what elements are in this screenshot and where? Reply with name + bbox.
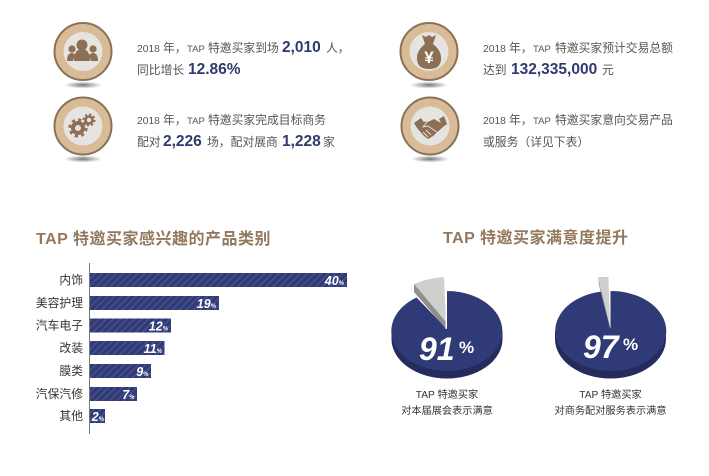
text: transaction amount: 达到 <box>483 63 507 77</box>
bar: beauty care 19%: 19% <box>197 297 217 311</box>
pie chart: 97% <box>555 277 666 378</box>
text: transaction amount: 元 <box>602 63 614 77</box>
text: matchmaking: 2018 <box>137 116 160 127</box>
bar: maintenance 7%: 7% <box>122 388 135 402</box>
text: attendee growth: 同比增长 <box>137 63 184 77</box>
caption: 91% <box>401 388 493 417</box>
icon: money bag badge <box>400 23 458 88</box>
bar: other 2% <box>59 409 105 424</box>
text: transaction value: TAP <box>533 44 551 55</box>
heading: product categories: TAP 特邀买家感兴趣的产品类别 <box>36 229 271 248</box>
pie chart: 91%: 91 <box>419 331 455 367</box>
bar: modification 11% <box>59 341 164 356</box>
icon: attendees badge <box>54 23 112 88</box>
bar: film 9%: 9% <box>136 365 149 379</box>
icon: gears badge <box>54 98 112 162</box>
icon: handshake badge <box>402 98 458 162</box>
bar: film 9%: 膜类 <box>59 364 83 378</box>
text: attendees: 人， <box>326 41 350 55</box>
bar: interior 40% <box>59 273 347 288</box>
text: matchmaking: 特邀买家完成目标商务 <box>208 113 326 127</box>
bar: car electronics 12% <box>36 318 171 334</box>
text: attendees: 特邀买家到场 <box>208 41 279 55</box>
bar: car electronics 12%: 12% <box>149 320 169 334</box>
text: matchmaking: 年， <box>163 113 187 127</box>
icon: money bag badge: ¥ <box>424 48 434 67</box>
text: attendees: 2018 <box>137 44 160 55</box>
text: products of interest: 特邀买家意向交易产品 <box>555 113 673 127</box>
text: attendees: 年， <box>163 41 187 55</box>
text: attendee growth: 12.86% <box>188 61 241 78</box>
text: transaction value: 特邀买家预计交易总额 <box>555 41 673 55</box>
bar chart: product categories <box>36 263 347 434</box>
text: transaction value: 2018 <box>483 44 506 55</box>
text: products of interest: TAP <box>533 116 551 127</box>
caption: 97% <box>554 388 667 417</box>
caption: 91%: TAP 特邀买家 <box>416 388 478 401</box>
bar: maintenance 7% <box>36 387 137 402</box>
text: matchmaking numbers: 2,226 <box>163 133 202 150</box>
heading: satisfaction: TAP 特邀买家满意度提升 <box>443 228 628 247</box>
bar: beauty care 19% <box>36 296 219 311</box>
text: attendees: 2,010 <box>282 39 321 56</box>
text: matchmaking numbers: 1,228 <box>282 133 321 150</box>
text: transaction value: 年， <box>509 41 533 55</box>
caption: 97%: TAP 特邀买家 <box>579 388 642 401</box>
bar: interior 40%: 40% <box>324 274 345 288</box>
text: transaction amount: 132,335,000 <box>511 61 597 78</box>
bar: maintenance 7%: 汽保汽修 <box>36 387 83 401</box>
bar: other 2%: 其他 <box>59 409 83 423</box>
text: matchmaking numbers: 配对 <box>137 135 161 149</box>
text: see table: 或服务（详见下表） <box>483 135 589 149</box>
bar: modification 11%: 改装 <box>59 341 83 355</box>
pie chart: 97%: % <box>623 335 638 354</box>
text: products of interest: 2018 <box>483 116 506 127</box>
caption: 91%: 对本届展会表示满意 <box>401 404 493 417</box>
bar: car electronics 12%: 汽车电子 <box>36 318 83 332</box>
pie chart: 91% <box>391 277 502 378</box>
text: matchmaking numbers: 场，配对展商 <box>207 135 278 149</box>
text: matchmaking: TAP <box>187 116 205 127</box>
bar: interior 40%: 内饰 <box>59 273 83 287</box>
bar: other 2%: 2% <box>91 410 105 424</box>
pie chart: 97%: 97 <box>583 329 621 365</box>
pie chart: 91%: % <box>459 338 474 357</box>
bar: film 9% <box>59 364 151 379</box>
text: matchmaking numbers: 家 <box>323 135 335 149</box>
caption: 97%: 对商务配对服务表示满意 <box>554 404 667 417</box>
text: products of interest: 年， <box>509 113 533 127</box>
bar: modification 11%: 11% <box>144 342 163 356</box>
text: attendees: TAP <box>187 44 205 55</box>
bar: beauty care 19%: 美容护理 <box>36 296 83 310</box>
